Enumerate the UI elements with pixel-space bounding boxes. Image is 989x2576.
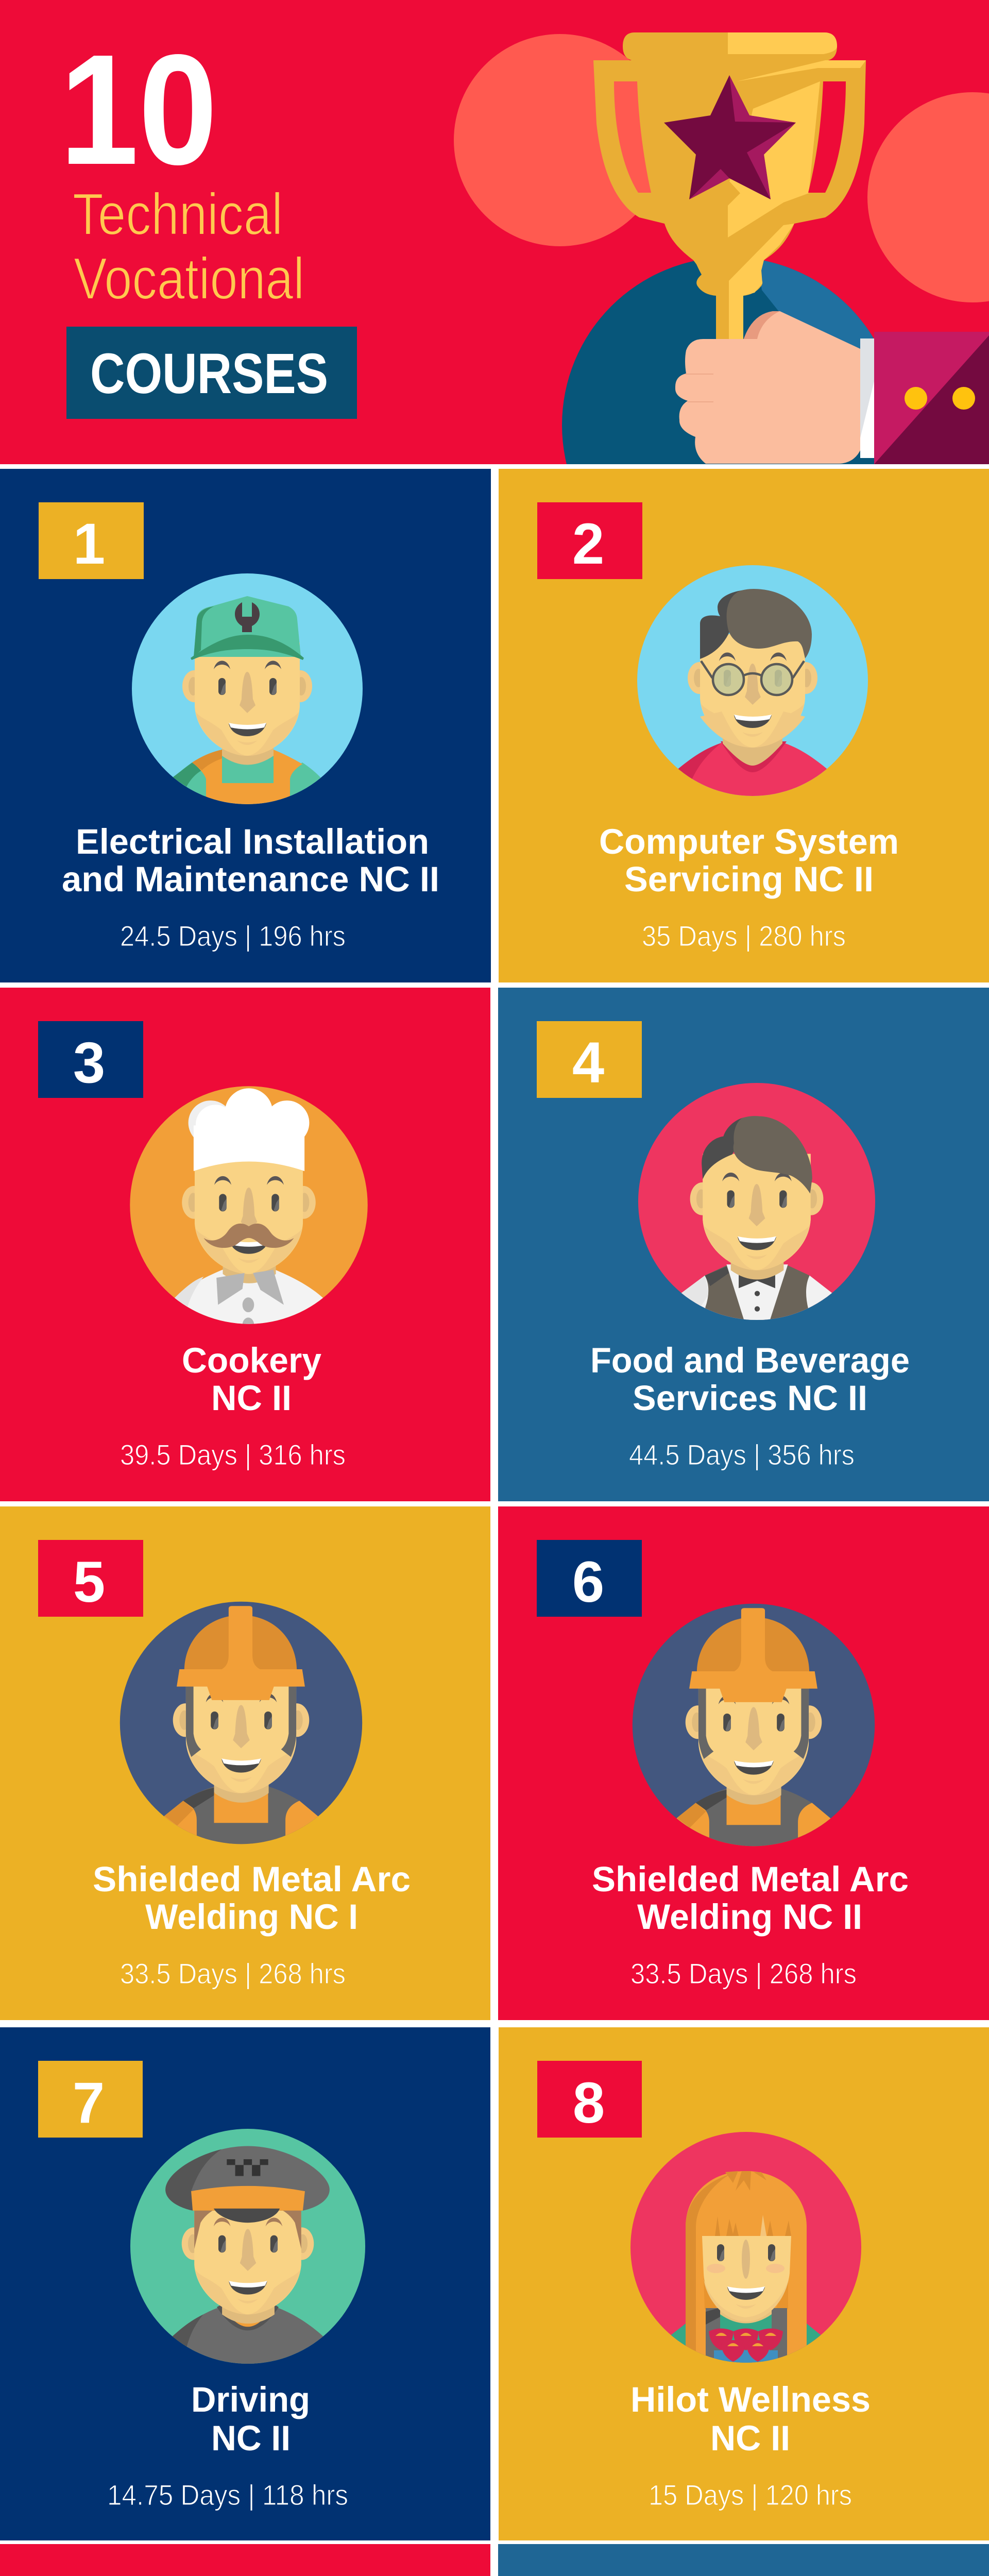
course card 3: Cookery bbox=[0, 988, 490, 1501]
number badge 2 bbox=[537, 502, 642, 579]
course title: Hilot Wellness bbox=[630, 2380, 871, 2419]
number badge 7: 7 bbox=[73, 2071, 105, 2135]
course title: Computer System bbox=[599, 822, 899, 861]
trophy star bbox=[664, 75, 796, 199]
course title bbox=[62, 822, 439, 899]
course title: Food and Beverage bbox=[590, 1341, 910, 1380]
number badge 4 bbox=[537, 1021, 642, 1098]
avatar: welder bbox=[120, 1602, 362, 1853]
course title bbox=[599, 822, 899, 899]
trophy bbox=[593, 32, 866, 340]
course title: Servicing NC II bbox=[624, 859, 874, 899]
course title: Welding NC I bbox=[145, 1897, 358, 1937]
duration: 15 Days | 120 hrs bbox=[649, 2479, 852, 2511]
duration: 24.5 Days | 196 hrs bbox=[120, 920, 346, 952]
number badge 1 bbox=[39, 502, 144, 579]
shirt cuff bbox=[860, 338, 874, 458]
course title: Driving bbox=[191, 2380, 310, 2419]
blue circle backdrop bbox=[562, 261, 874, 464]
hand bbox=[675, 311, 861, 464]
number badge 3: 3 bbox=[73, 1030, 105, 1095]
jacket sleeve bbox=[874, 332, 989, 464]
title word Technical: Technical bbox=[73, 182, 283, 247]
course title bbox=[182, 1341, 321, 1418]
duration: 44.5 Days | 356 hrs bbox=[629, 1438, 855, 1471]
trophy handle hole right bbox=[808, 81, 846, 193]
course card 10: Bread and Pastry Production bbox=[498, 2544, 989, 2576]
course title: Shielded Metal Arc bbox=[592, 1859, 909, 1899]
duration: 33.5 Days | 268 hrs bbox=[120, 1957, 346, 1990]
course title: Shielded Metal Arc bbox=[93, 1859, 411, 1899]
avatar: hilot therapist bbox=[630, 2132, 861, 2371]
course title: Cookery bbox=[182, 1341, 321, 1380]
courses label: COURSES bbox=[90, 342, 328, 405]
course title: Welding NC II bbox=[637, 1897, 862, 1937]
number badge 5 bbox=[38, 1540, 143, 1617]
course card 8: Hilot Wellness bbox=[499, 2027, 989, 2540]
course card 2: Computer System Servicing bbox=[499, 469, 989, 982]
number badge 7 bbox=[38, 2061, 143, 2138]
number badge 6 bbox=[537, 1540, 642, 1617]
course card 7: Driving bbox=[0, 2027, 490, 2540]
avatar: computer technician bbox=[637, 565, 868, 804]
course title: NC II bbox=[211, 2418, 291, 2458]
course title: NC II bbox=[710, 2418, 790, 2458]
decorative coral circle right bbox=[867, 92, 989, 302]
avatar: waiter bbox=[638, 1083, 875, 1328]
number badge 8 bbox=[537, 2061, 642, 2138]
course card 6: Shielded Metal Arc Welding NC II bbox=[498, 1506, 989, 2020]
course title: Services NC II bbox=[633, 1378, 867, 1418]
course title: and Maintenance NC II bbox=[62, 859, 439, 899]
course title bbox=[630, 2380, 871, 2458]
course card 1: Electrical Installation and Maintenance bbox=[0, 469, 491, 982]
number badge 3 bbox=[38, 1021, 143, 1098]
number badge 4: 4 bbox=[572, 1030, 604, 1095]
avatar: electrician bbox=[132, 573, 363, 812]
duration: 14.75 Days | 118 hrs bbox=[107, 2479, 348, 2511]
course card 5: Shielded Metal Arc Welding NC I bbox=[0, 1506, 490, 2020]
course card 4: Food and Beverage Services bbox=[498, 988, 989, 1501]
course title bbox=[590, 1341, 910, 1418]
decorative coral circle left bbox=[454, 34, 636, 246]
title word Vocational: Vocational bbox=[74, 246, 304, 312]
course title bbox=[191, 2380, 310, 2458]
number badge 5: 5 bbox=[73, 1550, 105, 1614]
courses label bbox=[66, 327, 357, 419]
number badge 1: 1 bbox=[73, 512, 105, 576]
course title bbox=[93, 1859, 411, 1937]
course title bbox=[592, 1859, 909, 1937]
icon: hand holding trophy bbox=[562, 32, 989, 464]
avatar: taxi driver bbox=[130, 2129, 365, 2372]
avatar: chef bbox=[130, 1086, 368, 1332]
lei flowers bbox=[709, 2329, 783, 2362]
number badge 6: 6 bbox=[572, 1550, 604, 1614]
duration: 35 Days | 280 hrs bbox=[642, 920, 846, 952]
trophy handle hole left bbox=[614, 81, 651, 193]
avatar: welder bbox=[633, 1604, 875, 1855]
number badge 8: 8 bbox=[573, 2071, 605, 2135]
title number 10: 10 bbox=[60, 22, 217, 197]
course title: Electrical Installation bbox=[76, 822, 429, 861]
header panel bbox=[0, 0, 989, 464]
duration: 39.5 Days | 316 hrs bbox=[120, 1438, 346, 1471]
course card 9: Housekeeping bbox=[0, 2544, 490, 2576]
number badge 2: 2 bbox=[572, 512, 604, 576]
course title: NC II bbox=[211, 1378, 292, 1418]
duration: 33.5 Days | 268 hrs bbox=[630, 1957, 857, 1990]
